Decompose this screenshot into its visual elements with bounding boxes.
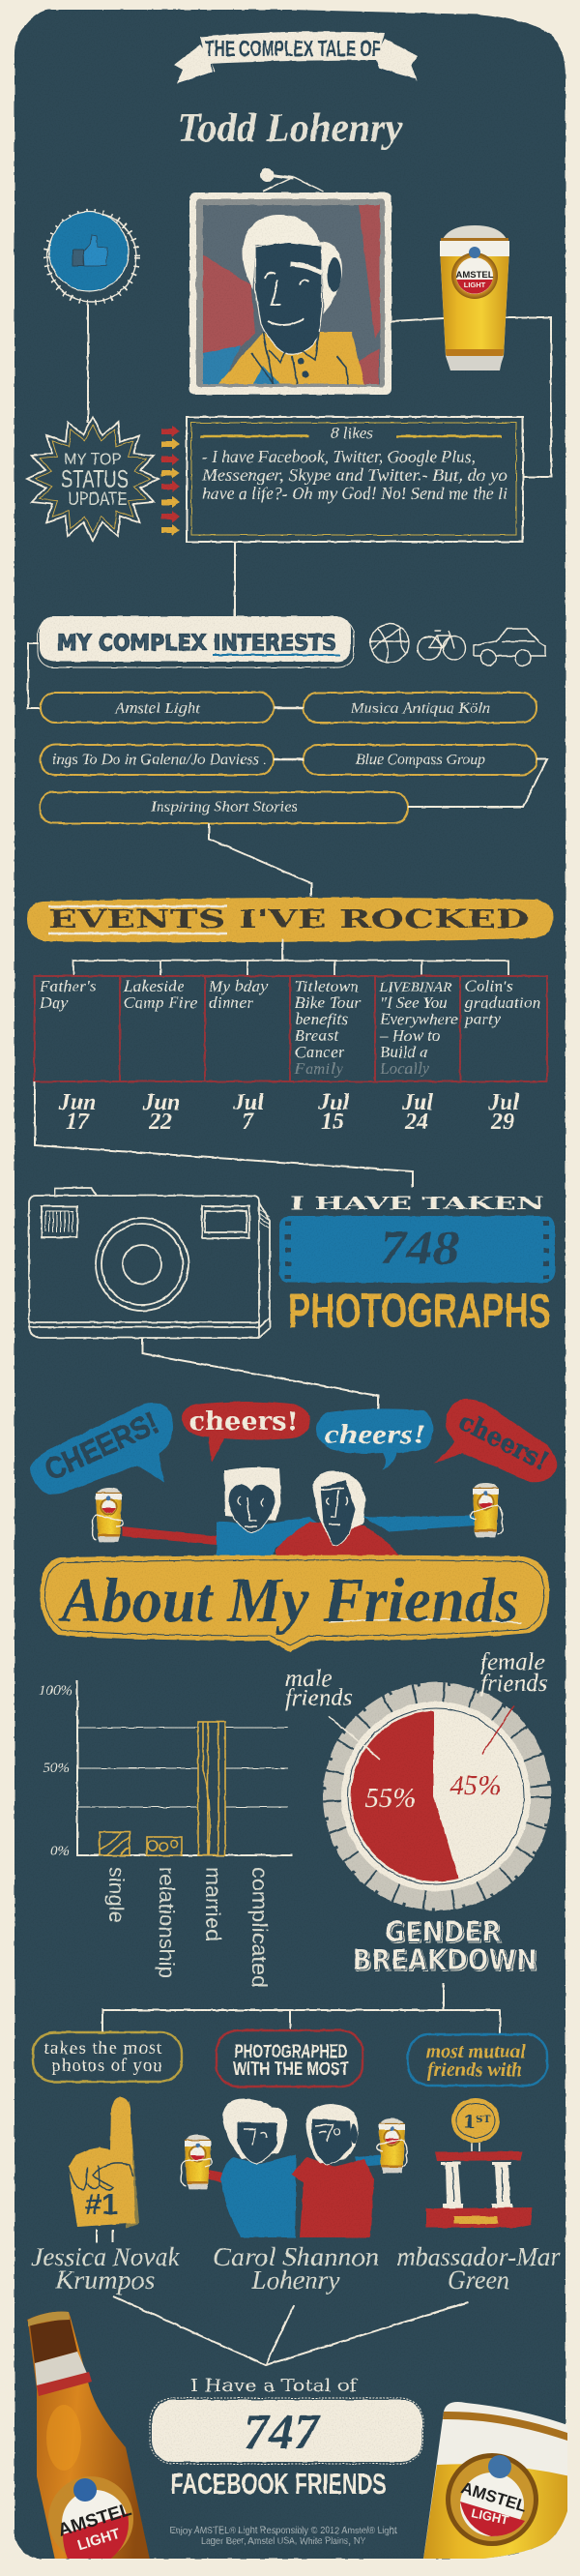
photo: pint label text: AMSTEL xyxy=(455,270,494,281)
icon: basketball xyxy=(370,624,409,663)
total friends box xyxy=(150,2398,423,2464)
event dates xyxy=(58,1090,519,1135)
icon: car xyxy=(474,629,545,666)
name: Jessica Novak Krumpos: Krumpos xyxy=(54,2265,155,2295)
event dates: Jul xyxy=(232,1090,264,1115)
footer text xyxy=(170,2525,397,2547)
event dates: 17 xyxy=(66,1110,90,1135)
connector: portrait to status box xyxy=(392,317,551,477)
icon: trophy: ST xyxy=(476,2115,491,2125)
bar chart: relationship status: 50% xyxy=(43,1761,70,1776)
pill: most mutual friends xyxy=(408,2034,547,2086)
interests heading xyxy=(38,616,354,667)
gender breakdown heading xyxy=(352,1915,538,1977)
speech bubble: blue script cheers: cheers! xyxy=(325,1420,425,1450)
events heading: EVENTS I'VE ROCKED xyxy=(48,905,529,934)
event: Lakeside Camp Fire: Camp Fire xyxy=(124,993,197,1012)
gender pie cap xyxy=(325,1685,549,1908)
icon: trophy: 1 xyxy=(463,2112,476,2133)
photo: pint label text: LIGHT xyxy=(464,281,486,289)
pill: photographed with the most: WITH THE MOST xyxy=(233,2059,349,2080)
speech bubble: red blackletter cheers: cheers! xyxy=(454,1407,553,1477)
icon: bicycle xyxy=(418,631,466,660)
event dates: Jul xyxy=(317,1090,349,1115)
event dates: Jul xyxy=(401,1090,433,1115)
callout: female friends xyxy=(480,1649,547,1754)
events heading xyxy=(27,898,553,942)
event dates: Jul xyxy=(487,1090,519,1115)
connector: interests to first pill xyxy=(28,643,41,708)
event dates: Jun xyxy=(142,1090,180,1115)
axis labels: complicated xyxy=(247,1867,272,1988)
event: LIVEBINAR: Build a xyxy=(380,1043,428,1061)
icon: picture hanger xyxy=(260,168,324,192)
bar: married xyxy=(198,1722,225,1855)
event: Titletown Bike Tour: benefits xyxy=(295,1010,348,1028)
event: LIVEBINAR: Locally xyxy=(379,1059,429,1078)
axis labels: married xyxy=(201,1867,225,1941)
pill: photographed with the most: PHOTOGRAPHED xyxy=(234,2042,348,2062)
connector: pills row two xyxy=(274,758,304,760)
gender breakdown heading: BREAKDOWN xyxy=(352,1943,537,1976)
interest pill: Amstel Light: Amstel Light xyxy=(114,700,201,717)
event: LIVEBINAR: LIVEBINAR xyxy=(379,980,451,995)
event: Colin's graduation party: party xyxy=(464,1010,502,1028)
interest pill: Musica Antiqua Köln: Musica Antiqua Köln xyxy=(349,700,491,717)
interest pill: Inspiring Short Stories: Inspiring Short Stories xyxy=(150,799,298,815)
callout: female friends: friends xyxy=(480,1671,547,1697)
name: Ambassador Green: Green xyxy=(448,2265,509,2295)
pill: photographed with the most xyxy=(217,2030,362,2087)
interest pill: Blue Compass Group xyxy=(304,745,536,775)
about my friends banner xyxy=(40,1555,549,1652)
speech bubble: red cheers xyxy=(182,1402,310,1463)
event: LIVEBINAR: – How to xyxy=(379,1026,440,1045)
illustration: two friends with beers xyxy=(181,2099,407,2237)
icon: foam finger: #1 xyxy=(85,2187,118,2221)
gender breakdown heading: BREAKDOWN xyxy=(354,1944,538,1977)
event: Father's Day: Father's xyxy=(39,977,97,995)
interest pill: Galena xyxy=(41,745,274,775)
photo: large pint: AMSTEL xyxy=(459,2478,529,2516)
name: Jessica Novak Krumpos: Jessica Novak xyxy=(31,2242,181,2271)
interest pill: Blue Compass Group: Blue Compass Group xyxy=(356,752,485,768)
pill: takes the most photos: takes the most xyxy=(44,2038,162,2058)
event: Titletown Bike Tour: Family xyxy=(294,1059,343,1078)
connector: names to total xyxy=(113,2296,468,2365)
icon: camera xyxy=(29,1188,270,1338)
event: LIVEBINAR: Everywhere xyxy=(379,1010,458,1028)
gender pie cap: 45% xyxy=(450,1770,502,1801)
event: My bday dinner: My bday xyxy=(208,977,268,995)
name: Jessica Novak Krumpos xyxy=(31,2242,181,2295)
ticket: photo count: 748 xyxy=(380,1220,459,1274)
event dates: 22 xyxy=(148,1110,172,1135)
total heading: I Have a Total of xyxy=(190,2376,359,2396)
name: Carol Shannon Lohenry: Lohenry xyxy=(250,2265,340,2295)
status update burst: UPDATE xyxy=(68,489,128,510)
about my friends banner: About My Friends xyxy=(58,1565,518,1636)
interest pill: Amstel Light xyxy=(41,693,274,723)
connector: cap to status xyxy=(87,305,89,423)
axis labels xyxy=(104,1867,272,1988)
icon: foam finger xyxy=(69,2097,139,2242)
event: Lakeside Camp Fire: Lakeside xyxy=(123,977,185,995)
callout: male friends xyxy=(285,1666,380,1760)
speech bubble: blue CHEERS: CHEERS! xyxy=(40,1405,163,1488)
connector: events tree xyxy=(73,938,508,975)
bar chart: relationship status xyxy=(39,1680,292,1988)
arrows column xyxy=(161,426,180,536)
interest pill: Musica Antiqua Köln xyxy=(304,693,536,723)
event: Titletown Bike Tour: Breast xyxy=(295,1026,340,1045)
speech bubble: blue script cheers xyxy=(316,1408,433,1470)
callout: male friends: male xyxy=(285,1666,333,1692)
connector: pills wrap xyxy=(408,759,547,807)
event dates: 15 xyxy=(321,1110,344,1135)
photo: amstel bottle: LIGHT xyxy=(75,2526,122,2554)
facebook friends heading: FACEBOOK FRIENDS xyxy=(170,2467,387,2501)
portrait frame xyxy=(189,192,392,395)
photo: pint of beer xyxy=(440,225,509,370)
status update box: - I have Facebook, Twitter, Google Plus, xyxy=(202,447,476,466)
gender breakdown heading: GENDER xyxy=(385,1915,501,1948)
pill: takes the most photos xyxy=(33,2032,182,2082)
status update box xyxy=(187,417,523,542)
total friends box: 747 xyxy=(244,2405,321,2460)
event: My bday dinner: dinner xyxy=(209,993,253,1012)
pill: takes the most photos: photos of you xyxy=(52,2056,162,2076)
bar: single xyxy=(100,1832,130,1855)
interest pill: Galena: ings To Do in Galena/Jo Daviess . xyxy=(52,752,267,768)
name: Ambassador Green xyxy=(396,2242,561,2295)
event dates: Jun xyxy=(58,1090,96,1115)
axis labels: relationship xyxy=(155,1867,179,1978)
gender breakdown heading: GENDER xyxy=(386,1917,503,1950)
event: Colin's graduation party: graduation xyxy=(465,993,541,1012)
status update box: Messenger, Skype and Twitter.- But, do yo xyxy=(201,465,508,485)
photo: amstel bottle xyxy=(27,2312,153,2573)
connector: events to camera xyxy=(35,1081,413,1187)
event dates: 29 xyxy=(490,1110,514,1135)
callout: male friends: friends xyxy=(285,1685,352,1711)
photo: large pint xyxy=(423,2402,567,2559)
name: Carol Shannon Lohenry xyxy=(213,2242,379,2295)
pill: most mutual friends: most mutual xyxy=(426,2041,526,2062)
bar chart: relationship status: 0% xyxy=(50,1844,70,1859)
events table xyxy=(35,976,547,1081)
connector: interests to events xyxy=(209,823,311,897)
connector: pills row one xyxy=(274,707,304,709)
gender pie cap: 55% xyxy=(364,1783,417,1814)
callout: female friends: female xyxy=(480,1649,545,1675)
axis labels: single xyxy=(104,1867,129,1923)
event: Titletown Bike Tour: Titletown xyxy=(295,977,359,995)
status update box: have a life?- Oh my God! No! Send me the li xyxy=(202,484,508,503)
photo: large pint: LIGHT xyxy=(470,2505,510,2528)
speech bubble: red cheers: cheers! xyxy=(189,1407,298,1436)
status update burst xyxy=(27,417,159,541)
interests heading: MY COMPLEX INTERESTS xyxy=(57,632,336,656)
event dates: 7 xyxy=(242,1110,254,1135)
title banner: THE COMPLEX TALE OF xyxy=(205,36,381,61)
event: Titletown Bike Tour: Cancer xyxy=(295,1043,345,1061)
connector: camera to cheers xyxy=(142,1338,378,1412)
ticket: photo count xyxy=(279,1216,555,1283)
connector: breakdown tree xyxy=(102,1983,500,2033)
photos heading: I HAVE TAKEN xyxy=(290,1194,544,1214)
event dates: 24 xyxy=(404,1110,428,1135)
photo: pint label text xyxy=(455,270,494,289)
event: Father's Day: Day xyxy=(39,993,68,1012)
event: Titletown Bike Tour: Bike Tour xyxy=(295,993,362,1012)
illustration: two friends toasting xyxy=(92,1467,503,1557)
connector: status to interests xyxy=(234,542,236,616)
photo: amstel bottle: AMSTEL xyxy=(56,2500,134,2541)
icon: like bottle cap xyxy=(46,212,137,303)
event: Colin's graduation party: Colin's xyxy=(465,977,513,995)
status update burst: MY TOP xyxy=(64,450,122,468)
name heading: Todd Lohenry xyxy=(178,106,403,151)
name: Ambassador Green: mbassador-Mar xyxy=(396,2242,561,2271)
bar: relationship xyxy=(147,1837,182,1855)
status update burst: STATUS xyxy=(61,464,129,493)
icon: trophy xyxy=(426,2098,533,2228)
footer text: Enjoy AMSTEL® Light Responsibly © 2012 Amstel® Light xyxy=(170,2525,397,2536)
interest pill: Inspiring Short Stories xyxy=(40,792,408,823)
pill: most mutual friends: friends with xyxy=(427,2059,522,2081)
status update box: 8 likes xyxy=(331,424,373,442)
footer text: Lager Beer, Amstel USA, White Plains, NY xyxy=(201,2535,365,2547)
title banner xyxy=(174,32,418,83)
name: Carol Shannon Lohenry: Carol Shannon xyxy=(213,2242,379,2271)
event: LIVEBINAR: "I See You xyxy=(380,993,448,1012)
bar chart: relationship status: 100% xyxy=(39,1683,72,1699)
